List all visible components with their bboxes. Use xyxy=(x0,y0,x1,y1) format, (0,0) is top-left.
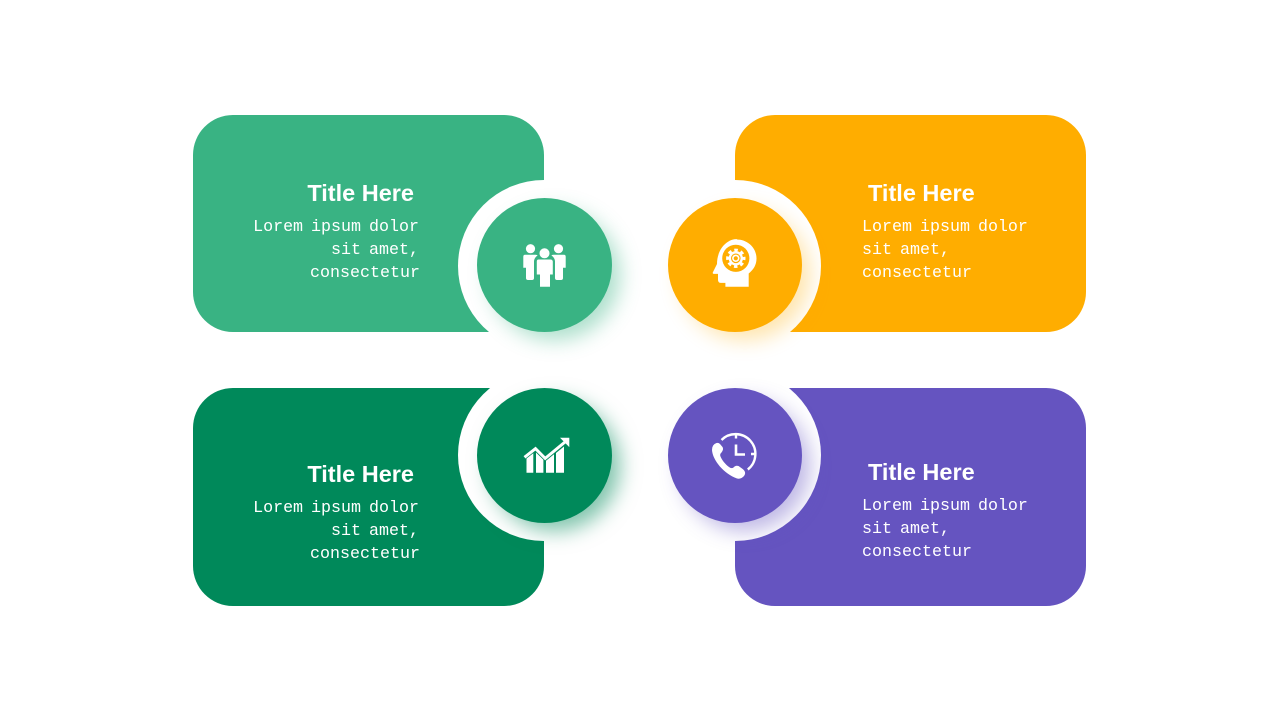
circle: top-left xyxy=(477,198,612,332)
ring: top-right xyxy=(649,180,821,352)
text: top-left xyxy=(253,218,420,283)
panel: bottom-right card xyxy=(735,388,1086,606)
circle: top-right xyxy=(668,198,802,332)
text: top-left: consectetur xyxy=(310,264,420,283)
ring: bottom-right xyxy=(649,369,821,541)
text: bottom-right xyxy=(862,497,1028,562)
text: top-right xyxy=(862,218,1028,283)
text: top-right: consectetur xyxy=(862,264,972,283)
text: bottom-right: Lorem ipsum dolor xyxy=(862,497,1028,516)
heading: top-left: Title Here xyxy=(307,180,414,206)
circle: bottom-right xyxy=(668,388,802,523)
heading: bottom-left: Title Here xyxy=(307,461,414,487)
text: top-right: Lorem ipsum dolor xyxy=(862,218,1028,237)
text: bottom-left: consectetur xyxy=(310,545,420,564)
panel: bottom-left card xyxy=(193,388,544,606)
text: top-left: Lorem ipsum dolor xyxy=(253,218,419,237)
text: bottom-left: Lorem ipsum dolor xyxy=(253,499,419,518)
text: bottom-left: sit amet, xyxy=(331,522,419,541)
heading: top-right: Title Here xyxy=(868,180,975,206)
text: top-left: sit amet, xyxy=(331,241,419,260)
text: top-right: sit amet, xyxy=(862,241,950,260)
panel: top-left card xyxy=(193,115,544,332)
text: bottom-right: sit amet, xyxy=(862,520,950,539)
ring: bottom-left xyxy=(458,369,630,541)
text: bottom-right: consectetur xyxy=(862,543,972,562)
text: bottom-left xyxy=(253,499,420,564)
heading: bottom-right: Title Here xyxy=(868,459,975,485)
panel: top-right card xyxy=(735,115,1086,332)
circle: bottom-left xyxy=(477,388,612,523)
ring: top-left xyxy=(458,180,630,352)
